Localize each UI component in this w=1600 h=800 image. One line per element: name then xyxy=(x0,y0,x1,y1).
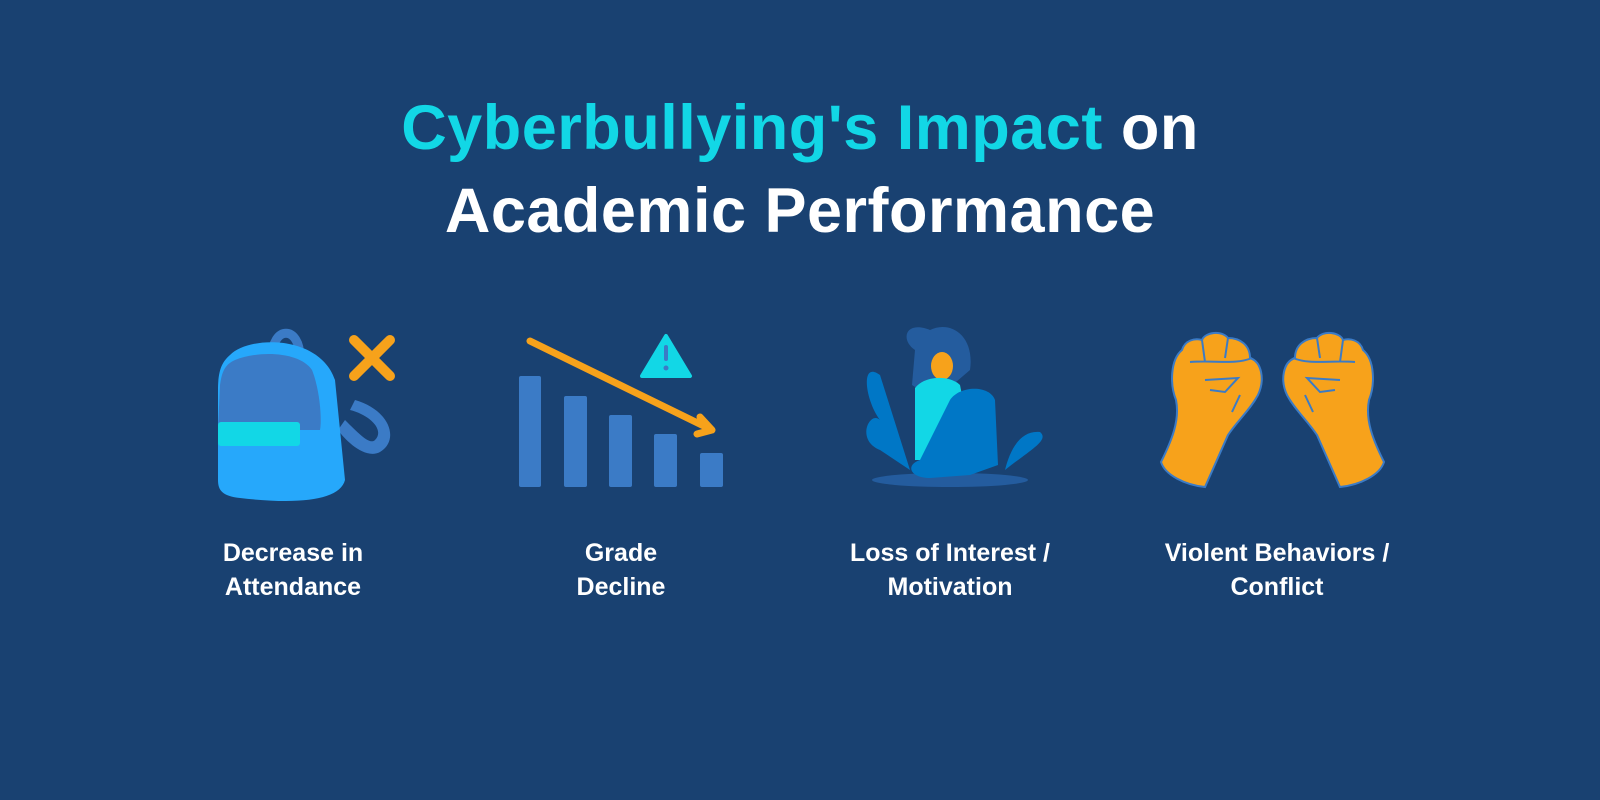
label: decrease in attendance: Attendance xyxy=(225,573,361,601)
label: violent behaviors: Violent Behaviors / xyxy=(1165,539,1389,567)
label: loss of interest: Loss of Interest / xyxy=(850,539,1050,567)
label: violent behaviors xyxy=(1164,539,1390,601)
label: decrease in attendance: Decrease in xyxy=(223,539,363,567)
label: decrease in attendance xyxy=(223,539,363,601)
label: grade decline: Decline xyxy=(577,573,665,601)
icon: declining bar chart xyxy=(519,336,723,487)
label: grade decline xyxy=(577,539,665,601)
title: Cyberbullying's Impact on xyxy=(401,93,1199,163)
icon: backpack with x xyxy=(218,333,390,501)
label: grade decline: Grade xyxy=(585,539,657,567)
label: loss of interest: Motivation xyxy=(888,573,1012,601)
title xyxy=(401,93,1199,246)
label: loss of interest xyxy=(850,539,1050,601)
icon: sad sitting person xyxy=(866,327,1043,487)
title: Academic Performance xyxy=(445,176,1155,246)
icon: two fists xyxy=(1161,333,1384,487)
label: violent behaviors: Conflict xyxy=(1230,573,1324,601)
